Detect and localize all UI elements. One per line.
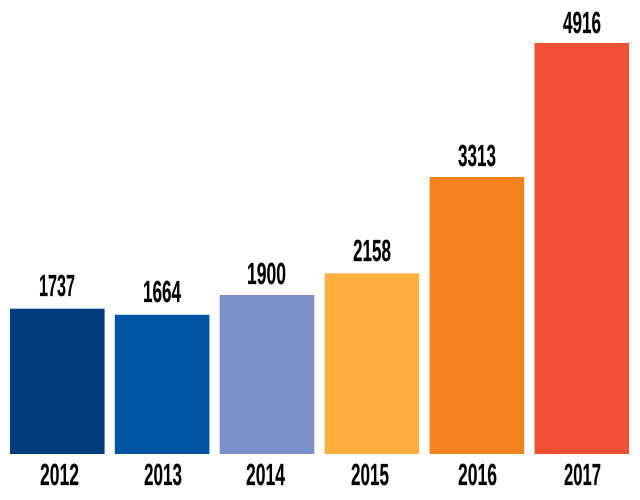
year label: 2016: 2016 [458, 457, 497, 492]
bar: 2014 [220, 295, 314, 454]
bar: 2013 [115, 315, 209, 454]
year label: 2017: 2017 [564, 457, 601, 492]
value: 2158: 2158 [353, 233, 391, 268]
value: 3313: 3313 [458, 138, 496, 173]
year label: 2014: 2014 [246, 457, 285, 492]
bar: 2012 [10, 309, 105, 454]
value: 4916: 4916 [563, 5, 601, 40]
value: 1664: 1664 [143, 274, 181, 309]
bar: 2016 [430, 177, 524, 454]
value: 1737: 1737 [39, 268, 75, 303]
value: 1900: 1900 [247, 256, 286, 291]
year label: 2015: 2015 [351, 457, 389, 492]
bar: 2017 [534, 43, 629, 454]
bar: 2015 [325, 273, 419, 454]
year label: 2013: 2013 [144, 457, 182, 492]
year label: 2012: 2012 [40, 457, 79, 492]
